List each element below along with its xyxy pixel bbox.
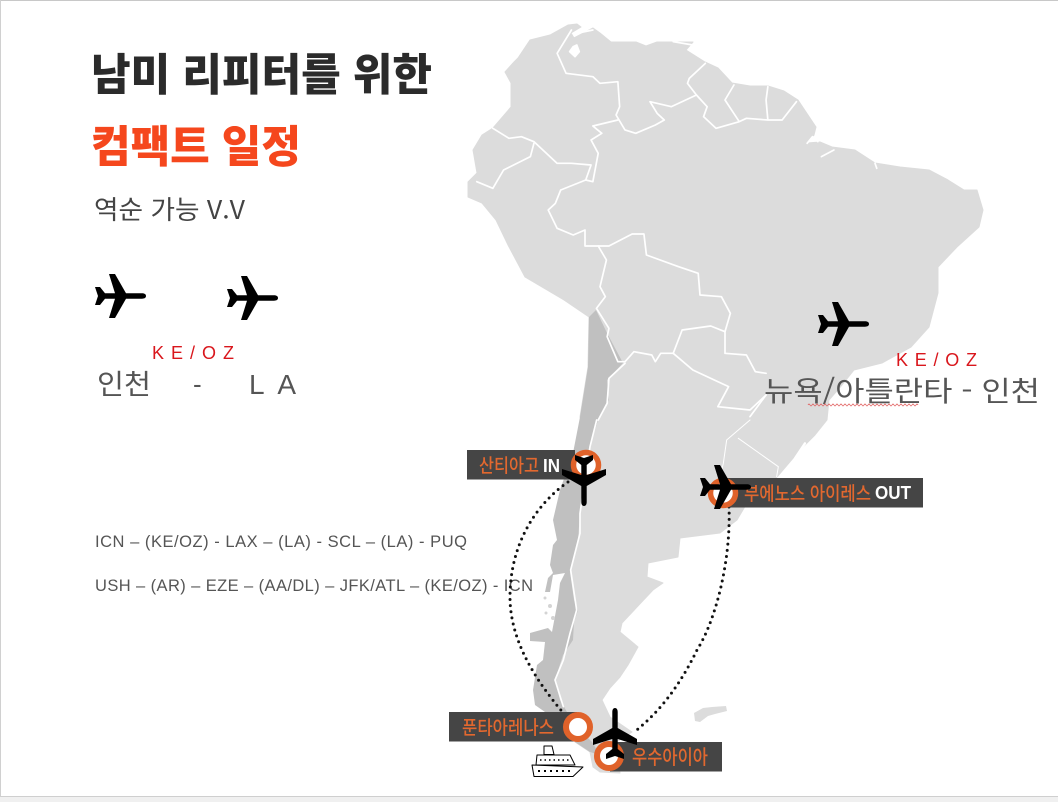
label: Santiago IN: 산티아고: [479, 451, 539, 478]
label: Buenos Aires OUT: 부에노스 아이레스: [744, 479, 871, 506]
dotted route: Santiago to Punta Arenas: [510, 482, 568, 715]
itinerary line 2: USH – (AR) – EZE – (AA/DL) – JFK/ATL – (KE/OZ) - ICN: [95, 577, 533, 595]
icon: plane at Santiago: [562, 455, 606, 506]
continent landmass: [468, 24, 983, 773]
route label: Incheon - LA: 인천: [97, 363, 151, 403]
route label: Incheon - LA: -: [193, 369, 202, 399]
Chile highlighted: [530, 310, 623, 755]
subtitle: 역순 가능 V.V: [94, 190, 245, 227]
label: Santiago IN: IN: [543, 456, 560, 476]
Patagonia fjord speckles: [544, 596, 555, 620]
label: Buenos Aires OUT: [710, 478, 923, 508]
route label: Incheon - LA: L A: [249, 369, 296, 400]
title line 1: 남미 리피터를 위한: [91, 39, 432, 103]
airline label: KE/OZ left: K E / O Z: [152, 343, 234, 363]
Falkland Islands: [694, 706, 727, 722]
icon: plane 1: [95, 274, 146, 318]
label: Santiago IN: [467, 450, 598, 480]
route label: Incheon - LA: [97, 363, 296, 403]
map: South America: [468, 24, 983, 773]
country borders: [477, 30, 877, 420]
label: Buenos Aires OUT: OUT: [875, 483, 911, 503]
icon: cruise ship: [532, 746, 583, 776]
icon: plane at Buenos Aires: [700, 465, 751, 509]
airline label: KE/OZ right: K E / O Z: [896, 350, 977, 370]
label: Punta Arenas: 푼타아레나스: [462, 713, 554, 740]
icon: plane 2: [227, 276, 278, 320]
dotted route: Buenos Aires to Ushuaia: [633, 507, 729, 733]
itinerary line 1: ICN – (KE/OZ) - LAX – (LA) - SCL – (LA) - PUQ: [95, 533, 467, 551]
label: Ushuaia: [597, 741, 722, 772]
icon: plane over Brazil: [818, 302, 869, 346]
icon: plane at Ushuaia: [593, 708, 637, 759]
label: Punta Arenas: [449, 712, 590, 742]
label: Ushuaia: 우수아이아: [632, 741, 708, 770]
title line 2: 컴팩트 일정: [91, 111, 301, 175]
route label: New York/Atlanta - Incheon: 뉴욕/아틀란타 - 인천: [764, 370, 1040, 410]
